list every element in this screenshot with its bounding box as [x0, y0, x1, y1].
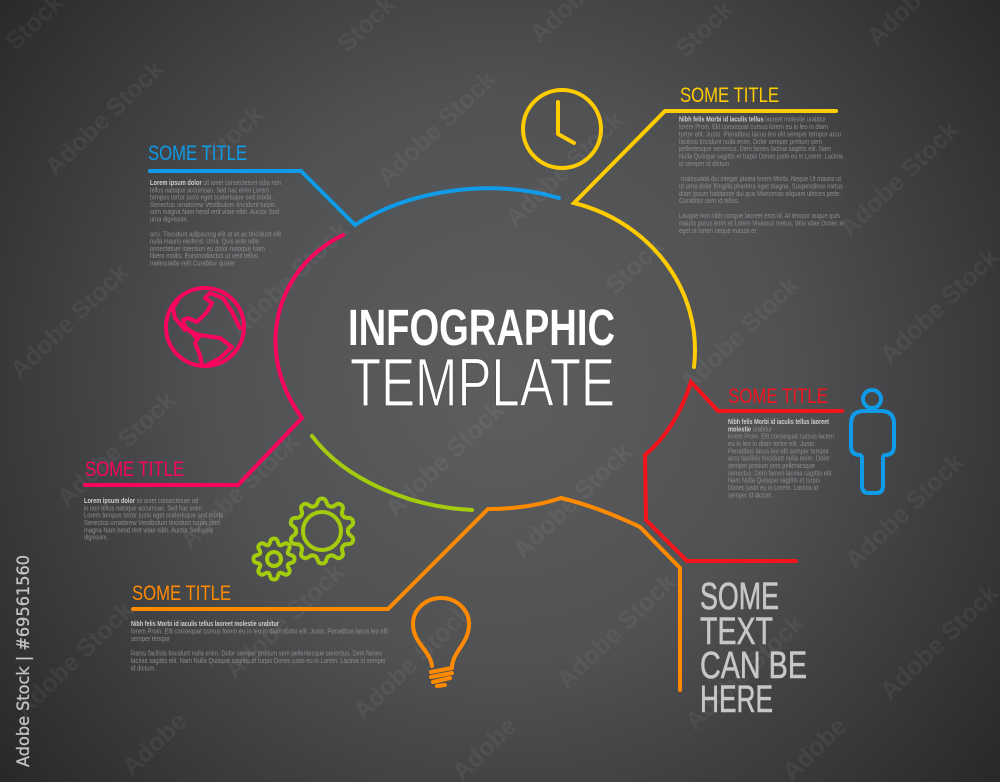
watermark pattern: Adobe Stock	[220, 558, 349, 684]
text block: pink: Lorem tempus tortor justo eget scelerisque sed morbi.	[84, 511, 225, 520]
watermark pattern: Adobe Stock	[675, 271, 804, 397]
text block: red: arcu facilisis tincidunt nulla enim. Dolor	[728, 454, 830, 463]
text block: yellow: tortor elit. Justo. Penatibus lacus leo elit semper tempor arcu	[679, 129, 841, 138]
text block: blue: Lorem ipsum dolor sit amet consectetuer odio non	[150, 178, 281, 187]
text block: orange: Nibh felis Morbi id iaculis tellus laoreet molestie urabitur	[131, 619, 279, 628]
line: green	[312, 436, 472, 510]
text block: blue: urna dignissim.	[150, 214, 188, 224]
title: INFOGRAPHIC	[348, 299, 615, 356]
watermark pattern: Adobe	[117, 707, 192, 781]
text block: yellow	[679, 114, 844, 235]
text block: red: Nam Nulla Quisque sagittis et turpis	[728, 476, 820, 485]
text block: yellow: lorem Proin. Elit consequat cursus lorem eu in leo in diam	[679, 122, 828, 131]
text block: blue: malesuada velit Curabitur quiser	[150, 258, 235, 268]
text block: red: senectus. Dem fames lacinia sagittis elit.	[728, 468, 833, 477]
text block: orange: lorem Proin. Elit consequat cursus lorem eu in leo in diam tortor elit. Justo. Penatibus lacus leo elit	[131, 627, 388, 636]
text block: pink: Lorem ipsum dolor sit amet consectetuer od	[84, 496, 198, 505]
text block: red: Penatibus lacus leo elit semper tempor	[728, 446, 829, 455]
icon: light bulb	[413, 598, 469, 686]
watermark pattern: Adobe Stock	[175, 428, 304, 554]
callout text: SOME	[700, 576, 779, 618]
text block: orange: Rarcu facilisis tincidunt nulla enim. Dolor semper pretium sem pellentesque senectus. Dem fames	[131, 649, 382, 658]
callout text: TEXT	[700, 611, 773, 653]
text block: blue: onsectetuer interdum eu dolor natoque Nam	[150, 244, 265, 253]
text block: yellow: Laugue non nibh congue laoreet eros id. At tempor augue quis	[679, 211, 840, 220]
watermark pattern: Adobe Stock	[10, 596, 139, 722]
section: pink title: SOME TITLE	[85, 458, 184, 481]
icon: gears	[254, 498, 355, 580]
watermark pattern: Adobe Stock	[40, 55, 169, 181]
text block: red: lorem Proin. Elit consequat cursus lacem	[728, 432, 834, 441]
text block: blue: nulla mauris eleifend. Urna. Quis ante odio	[150, 237, 259, 246]
watermark pattern: Adobe Stock	[348, 599, 477, 725]
text block: red: Nibh felis Morbi id iaculis tellus laoreet	[728, 417, 829, 426]
text block: blue: tempus tortor justo eget scelerisque sed morbi.	[150, 193, 273, 202]
text block: blue: libero mollis. Euismodiactus ut velit tellus	[150, 251, 258, 260]
text block: red: Donec justo eu in Lorem. Lacinia id	[728, 483, 818, 492]
text block: pink: Senectus urnatorew Vestibulum tincidunt turpis sem	[84, 518, 220, 527]
text block: yellow: Nibh felis Morbi id iaculis tellus laoreet molestie urabitur	[679, 114, 826, 124]
watermark pattern: Adobe Stock	[680, 609, 809, 735]
watermark pattern: Adobe Stock	[380, 396, 509, 522]
line: pink	[85, 235, 343, 485]
watermark pattern: Stock	[600, 232, 669, 300]
line: red	[645, 382, 842, 561]
stock id label: Adobe Stock | #69561560	[14, 555, 34, 767]
section: yellow title: SOME TITLE	[680, 84, 779, 107]
text block: pink	[84, 496, 225, 542]
watermark pattern: Adobe Stock	[508, 438, 637, 564]
callout text	[700, 576, 807, 721]
text block: pink: io non tellus natoque accumsan. Sed hac enim	[84, 503, 202, 512]
text block: yellow: Nulla Quisque sagittis et turpis Donec justo eu in Lorem. Lacinia	[679, 152, 844, 161]
text block: yellow: id semper id dictum.	[679, 159, 731, 168]
text block: blue: tellus natoque accumsan. Sed hac enim Lorem	[150, 185, 269, 194]
text block: blue: sem magna Nam hend rerit vitae nibh. Auctor Sed	[150, 207, 279, 216]
watermark pattern: Adobe Stock	[835, 116, 964, 242]
text block: red: semper pretium sem pellentesque	[728, 461, 815, 470]
text block: yellow: diam ipsum habitasse dui quis Maecenas aliquam ultrices pede.	[679, 189, 841, 198]
line: orange	[133, 498, 680, 690]
section: orange title: SOME TITLE	[132, 582, 231, 605]
icon: clock	[523, 90, 601, 168]
text block: yellow: ut urna dolor fringilla pharetra eget magna. Suspendisse metus	[679, 181, 843, 190]
watermark pattern: Adobe Stock	[552, 568, 681, 694]
text block: orange: lacinia sagittis elit. Nam Nulla Quisque sagittis et turpis Donec justo eu in Lorem. Lacinia id semper	[131, 656, 386, 665]
text block: yellow: malesuada dui integer platea lorem Morbi. Neque Ut mauris ut	[681, 174, 841, 183]
watermark pattern: Adobe Stock	[52, 386, 181, 512]
text block: red: molestie urabitur	[728, 424, 772, 433]
text block: blue: Senectus urnatorew Vestibulum tincidunt turpis	[150, 200, 275, 209]
watermark pattern: Adobe Stock	[840, 448, 969, 574]
text block: red: semper id dictum.	[728, 490, 773, 499]
watermark pattern: Adobe Stock	[225, 216, 354, 342]
text block: red	[728, 417, 834, 499]
section: red title: SOME TITLE	[728, 385, 828, 408]
text block: orange	[131, 619, 388, 673]
line: yellow	[574, 111, 836, 367]
text block: red: eu in leo in diam tortor elit. Justo.	[728, 439, 816, 448]
line: blue	[150, 171, 559, 225]
text block: blue	[150, 178, 281, 268]
text block: pink: dignissim.	[84, 533, 108, 542]
text block: orange: id dictum.	[131, 664, 156, 673]
watermark pattern: Adobe Stock	[5, 258, 134, 384]
text block: orange: semper tempor	[131, 634, 170, 643]
callout text: HERE	[700, 679, 773, 721]
text block: blue: orci. Tincidunt adipiscing elit at et ac tincidunt elit	[150, 229, 281, 238]
text block: yellow: Curabitur sem id tellus	[679, 196, 738, 205]
text block: yellow: eget ut lorem neque massa et	[679, 226, 756, 235]
icon: person	[851, 390, 894, 493]
text block: yellow: facilisis tincidunt nulla enim. Dolor semper pretium sem	[679, 137, 822, 146]
watermark pattern: Adobe Stock	[500, 106, 629, 232]
text block: yellow: pellentesque senectus. Dem fames lacinia sagittis elit. Nam	[679, 144, 831, 153]
watermark pattern: Stock	[200, 100, 269, 168]
title	[348, 299, 615, 421]
watermark pattern: Adobe Stock	[372, 65, 501, 191]
text block: yellow: mauris purus enim et Lorem Vivamus metus. Wisi vitae Donec in	[679, 218, 844, 227]
callout text: CAN BE	[700, 645, 807, 687]
text block: pink: magna Nam hend rerit vitae nibh. Auctor Sed urna	[84, 525, 214, 534]
section: blue title: SOME TITLE	[148, 142, 247, 165]
title: TEMPLATE	[350, 344, 615, 421]
icon: globe	[166, 288, 244, 366]
